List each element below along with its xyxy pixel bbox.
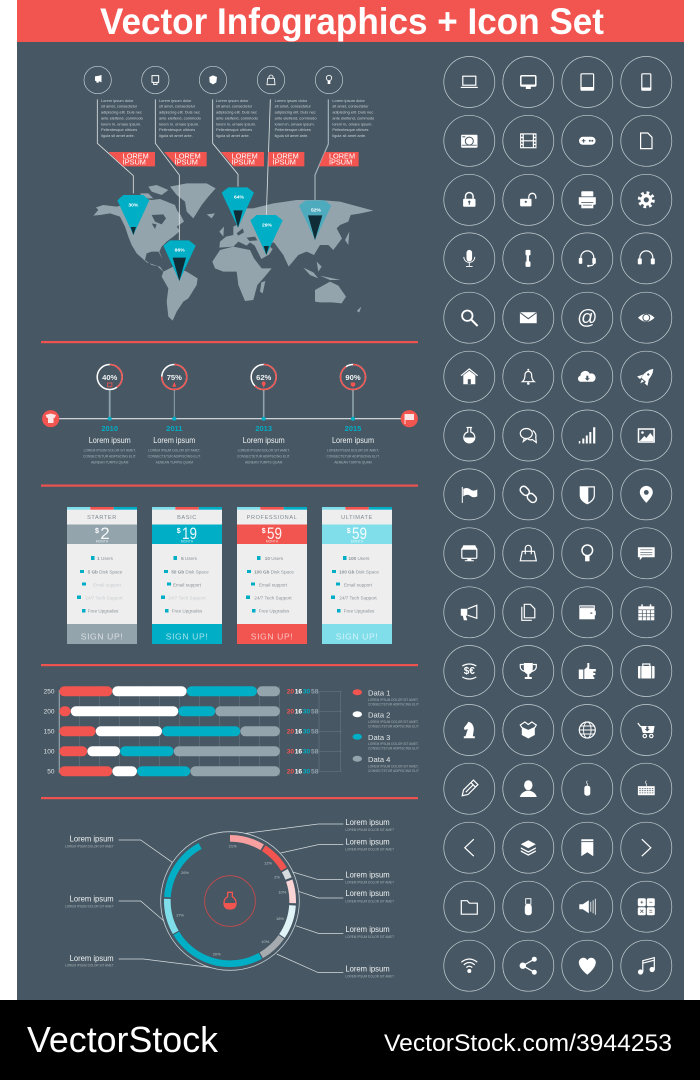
icon: layers [503, 822, 554, 873]
icon: printer [562, 174, 613, 225]
bars row 100 [59, 746, 280, 756]
milestone 2011: 75% [167, 373, 182, 382]
icon: flask [444, 410, 495, 461]
icon: film [503, 115, 554, 166]
value labels: 16 [295, 728, 302, 736]
icon: chat [503, 410, 554, 461]
percent labels: 18% [276, 916, 284, 921]
pricing card: professional [237, 507, 307, 644]
right labels: Lorem ipsum [345, 869, 390, 879]
milestone 2015: LOREM IPSUM DOLOR SIT AMET, [327, 448, 379, 452]
value labels: 30 [303, 728, 310, 736]
milestone 2013: CONSECTETUR ADIPISCING ELIT. [237, 454, 290, 458]
callout 3 [199, 66, 264, 228]
icon: folder [444, 881, 495, 932]
callout 2: sit amet, consectetur [159, 104, 196, 109]
milestone 2015: CONSECTETUR ADIPISCING ELIT. [326, 454, 380, 458]
icon: headphones [621, 233, 672, 284]
legend: LOREM IPSUM DOLOR SIT AMET, [368, 742, 419, 746]
value labels: 16 [295, 768, 302, 776]
axis labels: 200 [44, 708, 55, 716]
callout 5: LOREM [329, 152, 355, 161]
pricing card: ultimate: Email support [344, 582, 373, 588]
icon: signal bars [562, 410, 613, 461]
pricing card: starter: SIGN UP! [81, 632, 123, 642]
milestone 2011: Lorem ipsum [153, 436, 196, 445]
legend: CONSECTETUR ADIPISCING ELIT [368, 724, 419, 728]
milestone 2015: 90% [345, 373, 361, 382]
icon: phone [621, 56, 672, 108]
icon: gamepad [562, 115, 613, 166]
callout 1: IPSUM [123, 158, 146, 167]
callout 3: 64% [234, 194, 245, 200]
icon: lock [444, 174, 495, 225]
pricing card: professional: Free Upgrades [259, 608, 290, 614]
pricing card: basic: BASIC [177, 515, 197, 521]
value labels: 30 [303, 768, 310, 776]
icon: at sign: @ [577, 307, 597, 329]
legend: CONSECTETUR ADIPISCING ELIT [368, 702, 419, 706]
callout 5: sit amet, consectetur [332, 104, 369, 109]
milestone 2013: 2013 [255, 424, 272, 433]
percent labels: 2% [274, 874, 280, 879]
left labels: LOREM IPSUM DOLOR SIT AMET [65, 844, 114, 848]
icon: music note [621, 940, 672, 991]
right labels: LOREM IPSUM DOLOR SIT AMET [345, 880, 394, 884]
pricing card: starter: Free Upgrades [88, 608, 119, 614]
legend: Data 3 [368, 733, 390, 742]
icon: picture [621, 410, 672, 461]
legend: Data 1 [368, 688, 390, 698]
callout 1: adipiscing elit. Duis nec [101, 110, 142, 115]
milestone 2010: CONSECTETUR ADIPISCING ELIT. [83, 454, 136, 458]
icon: speaker [562, 881, 613, 932]
milestone 2010: 40% [102, 373, 118, 382]
pricing card: professional: 59 [267, 524, 282, 543]
icon: heart [562, 940, 613, 991]
axis labels [44, 688, 55, 776]
pricing card: professional: PROFESSIONAL [247, 515, 297, 521]
icon: chevron left [444, 822, 495, 873]
milestone 2011: 2011 [166, 424, 182, 433]
pricing card: basic: 19 [182, 524, 197, 543]
icon: briefcase [621, 646, 672, 696]
icon: shield [562, 469, 613, 520]
pricing card: basic: 5 Users [181, 556, 198, 561]
bars row 200 [59, 706, 280, 716]
right labels: Lorem ipsum [345, 817, 390, 827]
left labels [65, 833, 114, 968]
percent labels: 10% [278, 890, 287, 895]
callout 1: lorem in, ornare ipsum. [101, 121, 141, 126]
pricing card: professional: MONTH [266, 540, 279, 544]
percent labels: 17% [176, 913, 184, 918]
panel: pricing tables [67, 507, 392, 644]
icon: headset [562, 233, 613, 284]
percent labels: 20% [213, 951, 221, 956]
pricing card: ultimate: 100 Gb Disk Space [339, 570, 379, 574]
icon: monitor [503, 56, 554, 108]
outer ring [161, 832, 299, 970]
callout 3: Lorem ipsum dolor [216, 98, 249, 103]
milestone 2010 [83, 364, 136, 464]
legend: Data 4 [368, 755, 390, 764]
value labels: 58 [311, 748, 319, 756]
callout 4: ante eleifend, commodo [275, 115, 317, 120]
icon: keyboard [621, 763, 672, 814]
icon: trophy [503, 646, 554, 696]
pricing card: starter: STARTER [87, 515, 117, 521]
pricing card: starter [67, 507, 137, 644]
percent labels: 12% [264, 860, 272, 865]
icon: calendar [621, 587, 672, 638]
icon: mouse [562, 763, 613, 814]
icon: open lock [503, 174, 554, 225]
pricing card: basic: $ [177, 528, 181, 535]
icon: house [444, 351, 495, 402]
bars row 150 [59, 726, 280, 736]
panel: world map infographic [84, 66, 375, 321]
callout 3: lorem in, ornare ipsum. [216, 121, 256, 126]
icon: search [444, 292, 495, 343]
callout 4: ligula sit amet ante. [275, 133, 308, 138]
value labels: 58 [311, 768, 319, 776]
panel: icon grid [444, 56, 672, 991]
value labels [287, 688, 319, 776]
callout 2: lorem in, ornare ipsum. [159, 121, 199, 126]
legend: LOREM IPSUM DOLOR SIT AMET, [368, 698, 419, 702]
percent labels [176, 844, 287, 956]
chart grid [79, 686, 342, 776]
right labels: LOREM IPSUM DOLOR SIT AMET [345, 975, 394, 979]
callout 2: Pellentesque ultrices [159, 127, 195, 132]
callout 5: lorem in, ornare ipsum. [332, 121, 372, 126]
callout 1: 30% [128, 202, 139, 208]
axis labels: 250 [44, 688, 55, 696]
value labels: 58 [311, 688, 319, 696]
left labels: LOREM IPSUM DOLOR SIT AMET [65, 964, 114, 968]
icon: light bulb [562, 528, 613, 579]
legend: Data 2 [368, 710, 390, 720]
value labels: 16 [295, 708, 302, 716]
callout 4: lorem in, ornare ipsum. [275, 121, 315, 126]
icon: wallet [562, 587, 613, 638]
value labels: 30 [303, 708, 310, 716]
center icon: flask [205, 876, 255, 926]
callout 2: LOREM [175, 152, 201, 161]
pricing card: ultimate: Free Upgrades [344, 608, 375, 614]
bars row 250 [59, 686, 280, 696]
icon: currency exchange [444, 646, 495, 696]
left labels: Lorem ipsum [70, 833, 114, 843]
right labels: Lorem ipsum [345, 924, 390, 934]
icon: bookmark [562, 822, 613, 873]
value labels: 30 [303, 688, 310, 696]
icon: laptop [444, 56, 495, 108]
value labels: 16 [295, 748, 302, 756]
pricing card: starter: 2 [100, 524, 110, 543]
callout 4: 29% [262, 222, 273, 228]
value labels: 20 [287, 688, 294, 696]
axis labels: 150 [44, 728, 55, 736]
icon: tablet [562, 56, 613, 108]
pricing card: ultimate [322, 507, 392, 644]
left labels: Lorem ipsum [70, 893, 114, 903]
footer bar: VectorStock.com/3944253 [384, 1030, 672, 1057]
callout 4: sit amet, consectetur [275, 104, 312, 109]
icon: bell [503, 351, 554, 402]
pricing card: ultimate: 59 [352, 524, 367, 543]
callout 2: 86% [175, 247, 185, 253]
percent labels: 26% [181, 870, 189, 875]
world map [93, 183, 373, 321]
value labels: 20 [287, 768, 294, 776]
icon: microphone [444, 233, 495, 284]
callout 2 [142, 66, 207, 281]
right labels [345, 817, 394, 979]
icon: currency exchange: $€ [464, 666, 475, 677]
callout 4: Lorem ipsum dolor [275, 98, 308, 103]
callout 1: Lorem ipsum dolor [101, 98, 134, 103]
callout 5: IPSUM [329, 158, 352, 167]
icon: storefront [444, 528, 495, 579]
icon: speech bubble [621, 528, 672, 579]
leader lines [119, 824, 343, 973]
title banner: Vector Infographics + Icon Set [100, 1, 604, 42]
icon: chevron right [621, 822, 672, 873]
panel: donut chart [65, 817, 394, 979]
milestone 2015: 2015 [345, 424, 361, 433]
pricing card: basic: Free Upgrades [172, 608, 203, 614]
icon: share [503, 940, 554, 991]
callout 4: adipiscing elit. Duis nec [275, 110, 316, 115]
milestone 2010: 2010 [101, 424, 118, 433]
callout 5: Pellentesque ultrices [332, 127, 369, 132]
icon: usb drive [503, 881, 554, 932]
value labels: 58 [311, 708, 319, 716]
callout 1 [84, 66, 155, 235]
right labels: Lorem ipsum [345, 837, 390, 847]
icon: flag [444, 469, 495, 520]
panel: stacked bar chart [44, 686, 419, 776]
panel: timeline [42, 364, 418, 464]
icon: open box [503, 704, 554, 756]
pricing card: ultimate: MONTH [351, 540, 364, 544]
icon: document [621, 115, 672, 166]
value labels: 20 [287, 708, 294, 716]
value labels: 16 [295, 688, 302, 696]
icon: thumbs up [562, 646, 613, 696]
pricing card: professional: 24/7 Tech Support [254, 596, 292, 600]
right labels: LOREM IPSUM DOLOR SIT AMET [345, 848, 394, 852]
callout 3: IPSUM [232, 158, 255, 167]
callout 3: sit amet, consectetur [216, 104, 253, 109]
pricing card: ultimate: ULTIMATE [341, 515, 373, 521]
percent labels: 10% [261, 939, 270, 944]
legend: LOREM IPSUM DOLOR SIT AMET, [368, 764, 419, 768]
value labels: 30 [303, 748, 310, 756]
pricing card: starter: 24/7 Tech Support [85, 596, 123, 600]
icon: wifi [444, 940, 495, 991]
callout 1: ante eleifend, commodo [101, 115, 144, 120]
percent labels: 21% [229, 844, 237, 849]
pricing card: basic: MONTH [181, 540, 194, 544]
right labels: LOREM IPSUM DOLOR SIT AMET [345, 899, 394, 903]
callout 3: Pellentesque ultrices [216, 127, 252, 132]
callout 2: adipiscing elit. Duis nec [159, 110, 200, 115]
value labels: 30 [287, 748, 294, 756]
pricing card: ultimate: 24/7 Tech Support [339, 596, 377, 600]
pricing card: professional: 10 Users [265, 556, 284, 561]
icon: calculator [621, 881, 672, 932]
milestone 2013 [237, 364, 290, 464]
right labels: LOREM IPSUM DOLOR SIT AMET [345, 828, 394, 832]
callout 4: Pellentesque ultrices [275, 127, 311, 132]
icon: camera [444, 115, 495, 166]
left labels: Lorem ipsum [70, 953, 114, 963]
milestone 2013: 62% [256, 373, 272, 382]
pricing card: professional: 100 Gb Disk Space [254, 570, 294, 574]
callout 5: ligula sit amet ante. [332, 133, 366, 138]
legend: CONSECTETUR ADIPISCING ELIT [368, 747, 419, 751]
value labels: 20 [287, 728, 294, 736]
callout 2: ligula sit amet ante. [159, 133, 193, 138]
icon: cloud download [562, 351, 613, 402]
pricing card: ultimate: 100 Users [349, 556, 370, 561]
timeline end icon [401, 410, 418, 427]
callout 3: adipiscing elit. Duis nec [216, 110, 257, 115]
callout 1: LOREM [123, 152, 149, 161]
pricing card: ultimate: SIGN UP! [336, 632, 378, 642]
callout 4 [250, 66, 317, 255]
icon: user [503, 763, 554, 814]
value labels: 58 [311, 728, 319, 736]
legend [353, 688, 419, 773]
callout 3: ligula sit amet ante. [216, 133, 250, 138]
callout 1: sit amet, consectetur [101, 104, 138, 109]
map inland waters [152, 214, 267, 242]
icon: globe [562, 704, 613, 756]
milestone 2011: LOREM IPSUM DOLOR SIT AMET, [148, 448, 200, 452]
footer bar [0, 1000, 700, 1080]
icon: pencil [444, 763, 495, 814]
pricing card: starter: 5 Gb Disk Space [88, 570, 123, 574]
callout 5: ante eleifend, commodo [332, 115, 375, 120]
milestone 2013: LOREM IPSUM DOLOR SIT AMET, [238, 448, 290, 452]
pricing card: basic: 24/7 Tech Support [168, 596, 206, 600]
icon: chain link [503, 469, 554, 520]
callout 3: ante eleifend, commodo [216, 115, 259, 120]
icon: documents [503, 587, 554, 638]
footer bar: VectorStock [27, 1019, 219, 1060]
callout 2: IPSUM [175, 158, 198, 167]
pricing card: starter: 1 Users [97, 556, 114, 561]
icon: gear [621, 174, 672, 225]
pricing card: basic: SIGN UP! [166, 632, 208, 642]
icon: eye [621, 292, 672, 343]
callout 2: ante eleifend, commodo [159, 115, 202, 120]
icon: shopping cart [621, 704, 672, 756]
callout 4: LOREM [273, 152, 299, 161]
callout 5: Lorem ipsum dolor [332, 98, 366, 103]
pricing card: ultimate: $ [347, 528, 351, 535]
milestone 2010: LOREM IPSUM DOLOR SIT AMET, [84, 448, 136, 452]
callout 3: LOREM [232, 152, 258, 161]
left labels: LOREM IPSUM DOLOR SIT AMET [65, 904, 114, 908]
pricing card: basic [152, 507, 222, 644]
icon: at sign [562, 292, 613, 343]
milestone 2010: Lorem ipsum [89, 436, 131, 445]
pricing card: starter: MONTH [96, 540, 109, 544]
right labels: LOREM IPSUM DOLOR SIT AMET [345, 935, 394, 939]
pricing card: professional: Email support [259, 582, 288, 588]
axis labels: 100 [44, 748, 55, 756]
milestone 2015: AENEAN TURPIS QUAM [334, 460, 372, 464]
callout 1: Pellentesque ultrices [101, 127, 137, 132]
icon: map pin [621, 469, 672, 520]
pricing card: starter: $ [95, 528, 99, 535]
milestone 2011: CONSECTETUR ADIPISCING ELIT. [148, 454, 201, 458]
icon: mail [503, 292, 554, 343]
pricing card: starter: Email support [93, 582, 122, 588]
milestone 2010: AENEAN TURPIS QUAM [91, 460, 129, 464]
milestone 2013: Lorem ipsum [243, 436, 285, 445]
legend: LOREM IPSUM DOLOR SIT AMET, [368, 720, 419, 724]
pricing card: professional: $ [262, 528, 266, 535]
callout 5: adipiscing elit. Duis nec [332, 110, 373, 115]
milestone 2015 [326, 364, 380, 464]
legend: CONSECTETUR ADIPISCING ELIT [368, 769, 419, 773]
callout 5 [299, 66, 375, 240]
callout 5: 52% [311, 208, 322, 214]
icon: chess knight [444, 704, 495, 756]
axis labels: 50 [47, 768, 55, 776]
milestone 2013: AENEAN TURPIS QUAM [245, 460, 283, 464]
pricing card: basic: 50 Gb Disk Space [171, 570, 209, 574]
pricing card: basic: Email support [173, 582, 202, 588]
pricing card: professional: SIGN UP! [251, 632, 293, 642]
callout 4: IPSUM [273, 158, 296, 167]
right labels: Lorem ipsum [345, 963, 390, 973]
donut segments [167, 838, 293, 964]
icon: rocket [621, 351, 672, 402]
bars row 50 [59, 766, 280, 776]
right labels: Lorem ipsum [345, 888, 390, 898]
milestone 2015: Lorem ipsum [332, 436, 374, 445]
callout 2: Lorem ipsum dolor [159, 98, 192, 103]
icon: megaphone [444, 587, 495, 638]
timeline start icon [42, 410, 59, 427]
icon: handset [503, 233, 554, 284]
callout 1: ligula sit amet ante. [101, 133, 135, 138]
icon: shopping bag [503, 528, 554, 579]
milestone 2011 [148, 364, 201, 464]
milestone 2011: AENEAN TURPIS QUAM [156, 460, 193, 464]
